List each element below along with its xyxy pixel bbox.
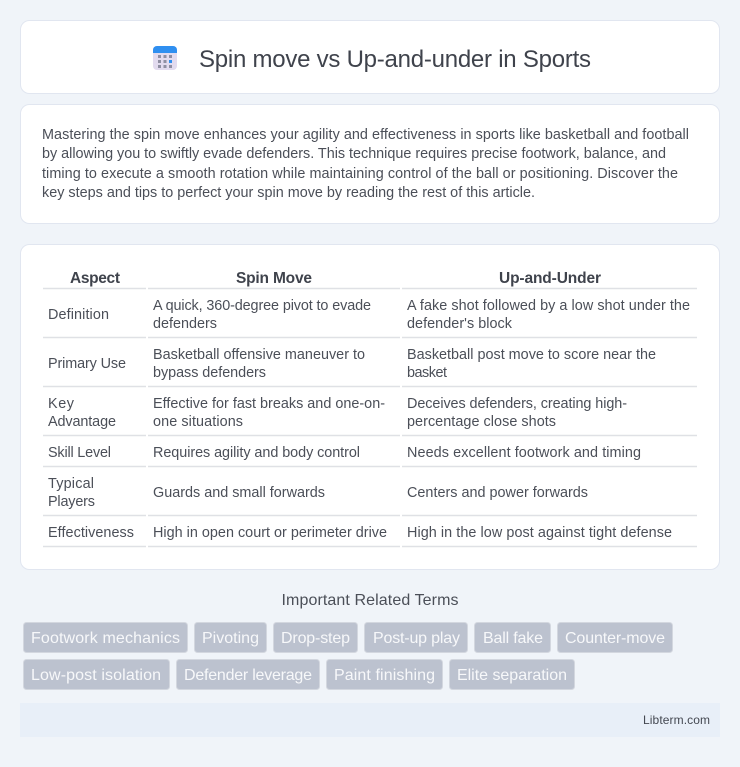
row: typical players — [48, 476, 588, 510]
row: primary use — [48, 347, 656, 381]
tag: post-up play — [364, 622, 468, 652]
row: definition: A fake shot followed by a low shot under the — [407, 298, 690, 314]
row: skill level: Skill Level — [48, 445, 111, 461]
row: key advantage — [48, 396, 627, 430]
tag: drop-step: Drop-step — [281, 630, 350, 647]
tag: pivoting: Pivoting — [202, 630, 259, 647]
row: typical players: Players — [48, 494, 95, 510]
row: key advantage: Advantage — [48, 414, 116, 430]
text block: introduction: Mastering the spin move enhances your agility and effectiveness in sports like basketball and football — [42, 127, 689, 143]
tag: ball fake — [474, 622, 550, 652]
panel: comparison table — [20, 244, 720, 570]
tag: pivoting — [194, 622, 266, 652]
text block: introduction — [42, 127, 689, 201]
tag: counter-move: Counter-move — [565, 630, 665, 647]
tag: paint finishing — [326, 660, 442, 690]
table header: Aspect — [70, 270, 120, 287]
row: typical players: Centers and power forwards — [407, 485, 588, 501]
row: primary use: Basketball offensive maneuver to — [153, 347, 365, 363]
row: definition: defenders — [153, 316, 217, 332]
tag: elite separation: Elite separation — [457, 667, 567, 684]
text block: introduction: key steps and tips to perfect your spin move by reading the rest of this article. — [42, 185, 535, 201]
row: key advantage: Effective for fast breaks and one-on- — [153, 396, 385, 412]
tag: low-post isolation — [24, 660, 170, 690]
row: typical players: Guards and small forwards — [153, 485, 325, 501]
tag: footwork mechanics — [24, 622, 188, 652]
footer credit: Libterm.com — [643, 713, 710, 727]
icon: calendar — [153, 46, 177, 70]
row: key advantage: one situations — [153, 414, 243, 430]
title: Spin move vs Up-and-under in Sports — [199, 46, 591, 73]
row: skill level: Needs excellent footwork and timing — [407, 445, 641, 461]
row: primary use: basket — [407, 365, 447, 381]
tag: post-up play: Post-up play — [373, 630, 460, 647]
row: typical players: Typical — [48, 476, 94, 492]
row: key advantage: Deceives defenders, creating high- — [407, 396, 627, 412]
tag: defender leverage — [176, 660, 320, 690]
tag: footwork mechanics: Footwork mechanics — [31, 630, 180, 647]
row: skill level — [48, 445, 641, 461]
row: key advantage: Key — [48, 396, 75, 412]
panel: introduction — [20, 104, 720, 224]
table header — [70, 270, 601, 287]
tag: elite separation — [450, 660, 574, 690]
row: effectiveness: High in open court or perimeter drive — [153, 525, 387, 541]
heading: important related terms: Important Related Terms — [282, 592, 458, 609]
tag: low-post isolation: Low-post isolation — [31, 667, 161, 684]
tag: drop-step — [274, 622, 358, 652]
tag: defender leverage: Defender leverage — [184, 667, 312, 684]
row: definition: A quick, 360-degree pivot to evade — [153, 298, 371, 314]
tag: ball fake: Ball fake — [483, 630, 543, 647]
row: skill level: Requires agility and body control — [153, 445, 360, 461]
tag: counter-move — [558, 622, 672, 652]
panel: title header — [20, 20, 720, 94]
table header: Spin Move — [236, 270, 312, 287]
footer bar — [20, 703, 720, 737]
table header: Up-and-Under — [499, 270, 601, 287]
row: primary use: Primary Use — [48, 356, 126, 372]
row: definition: defender's block — [407, 316, 513, 332]
text block: introduction: timing to execute a smooth rotation while maintaining control of the ball or positioning. Discover the — [42, 166, 678, 182]
text block: introduction: by allowing you to swiftly evade defenders. This technique requires precise footwork, balance, and — [42, 146, 666, 162]
row: definition: Definition — [48, 307, 109, 323]
tag: paint finishing: Paint finishing — [334, 667, 435, 684]
row: definition — [48, 298, 690, 332]
row: primary use: bypass defenders — [153, 365, 266, 381]
row: primary use: Basketball post move to score near the — [407, 347, 656, 363]
row: effectiveness: Effectiveness — [48, 525, 134, 541]
row: effectiveness — [48, 525, 672, 541]
tag group: related terms — [24, 622, 672, 690]
row: effectiveness: High in the low post against tight defense — [407, 525, 672, 541]
row: key advantage: percentage close shots — [407, 414, 556, 430]
